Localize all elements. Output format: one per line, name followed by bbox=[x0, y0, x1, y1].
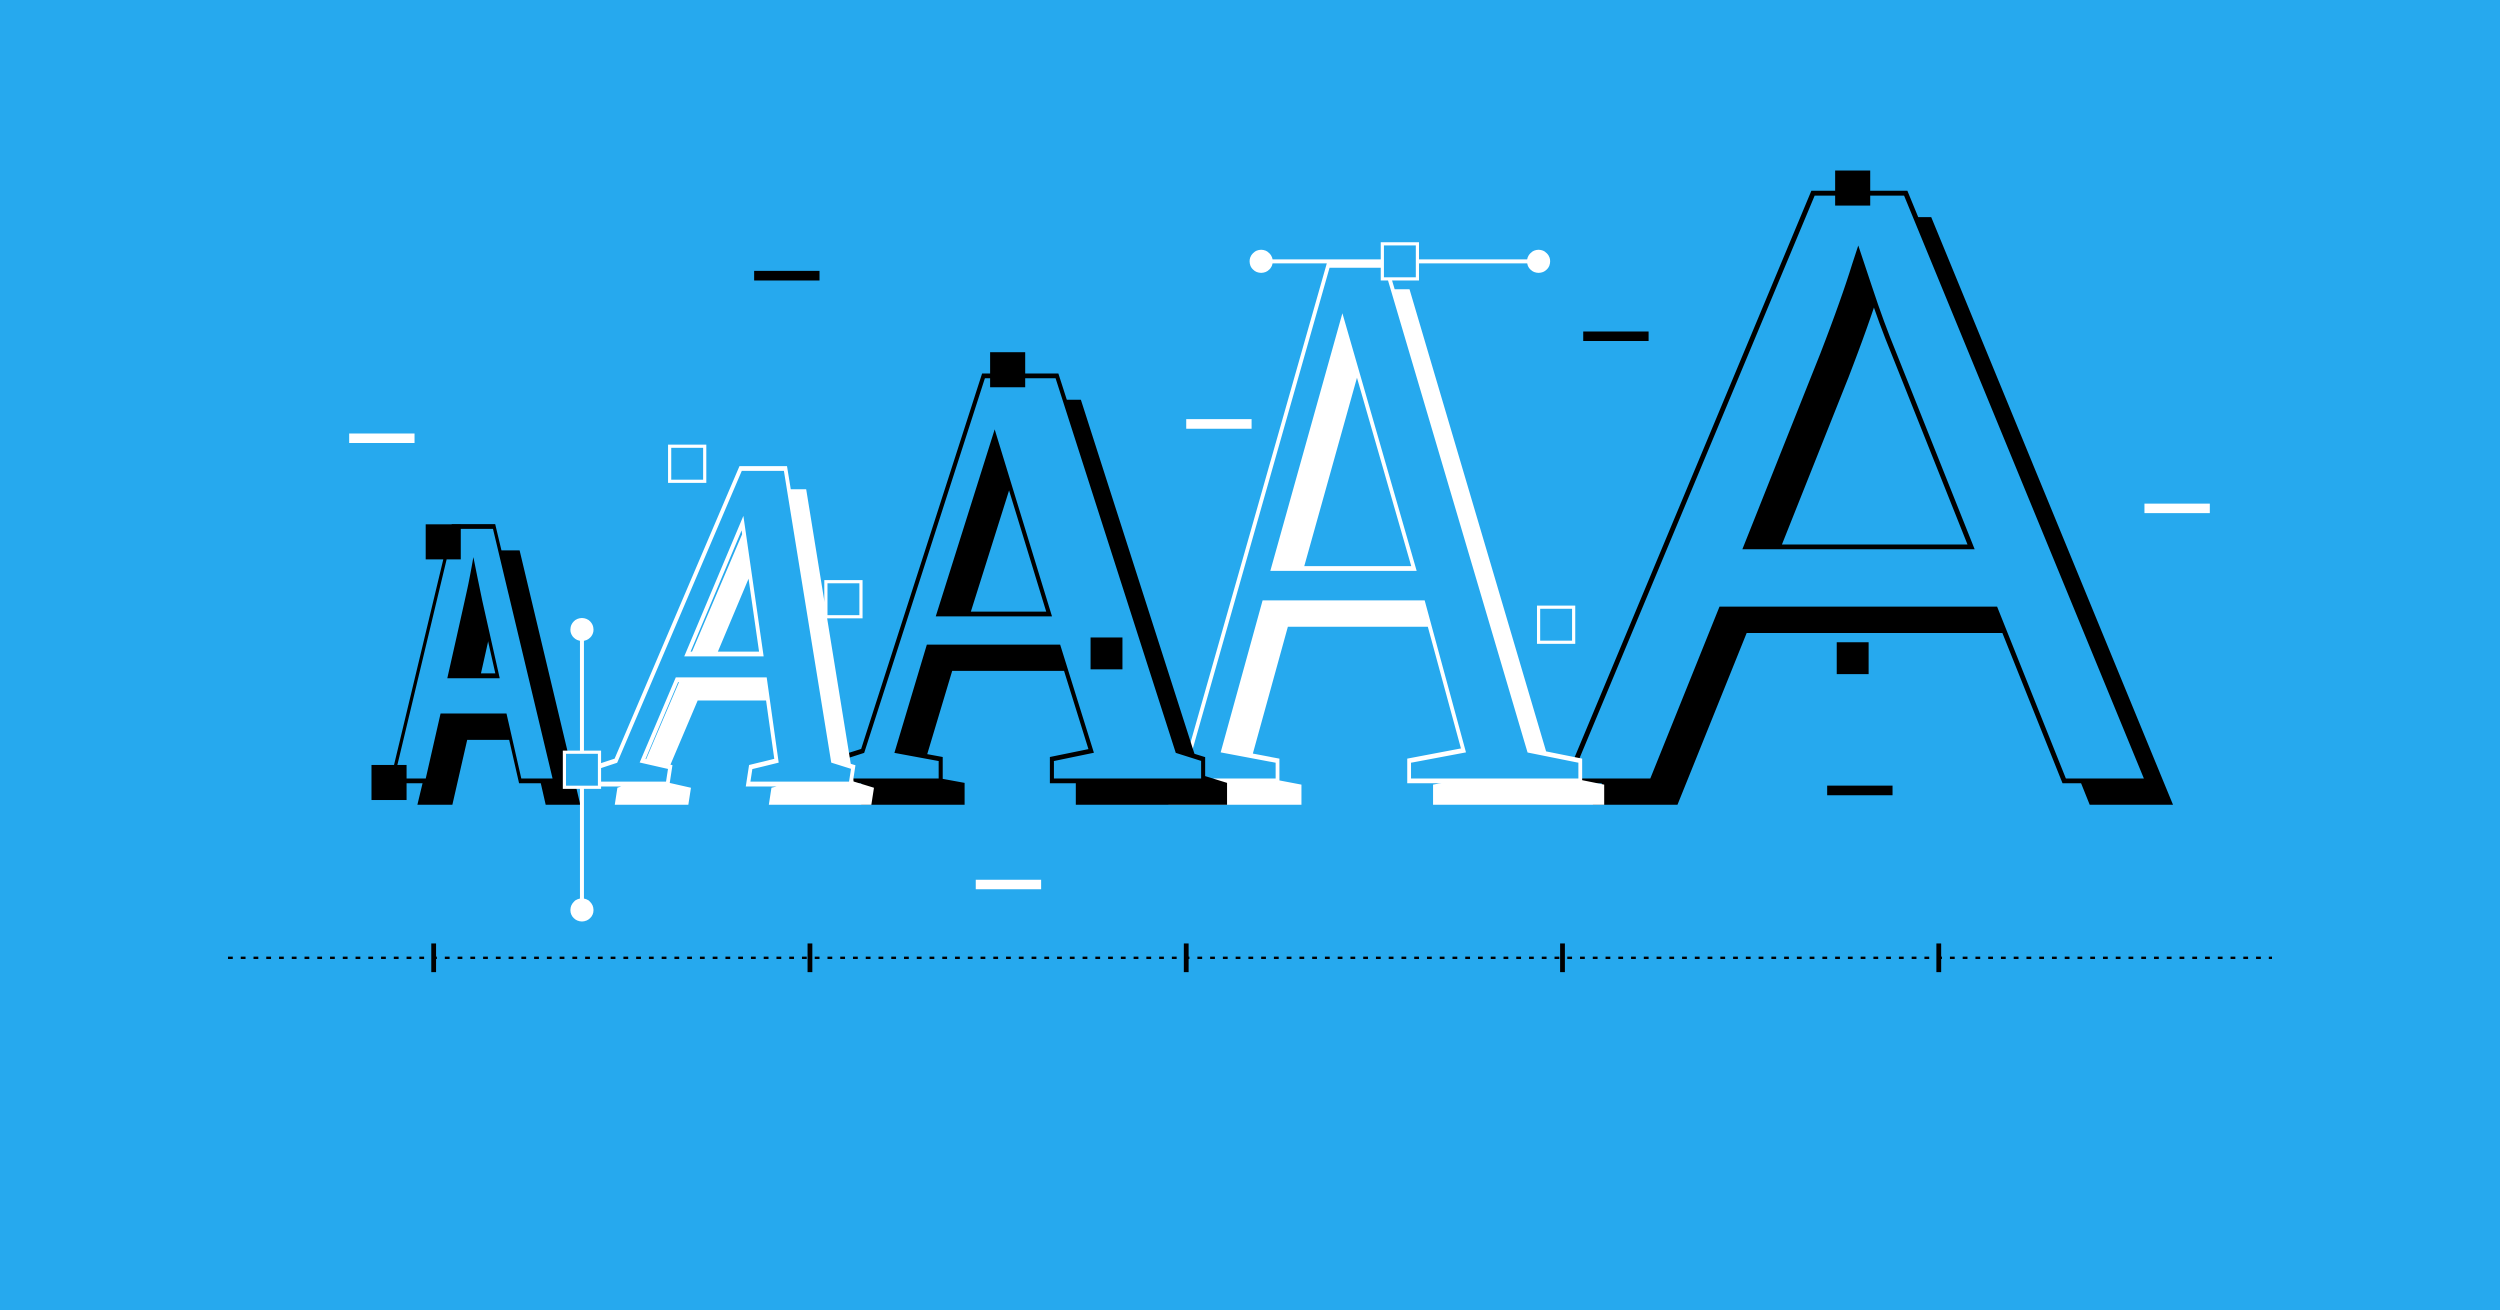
anchor points bbox=[371, 171, 1870, 800]
letter: swash A white: A bbox=[611, 380, 890, 909]
bezier handle lines bbox=[572, 252, 1548, 920]
dashes bbox=[349, 276, 2210, 884]
letter: display A black: A bbox=[832, 234, 1207, 914]
letter: blackletter A: A bbox=[386, 447, 561, 860]
baseline dotted ruler bbox=[228, 943, 2272, 972]
letter: large sans A: A bbox=[1566, 9, 2153, 963]
letter: serif A white: A bbox=[1138, 85, 1585, 950]
letter: blackletter A: A bbox=[411, 471, 587, 884]
letter: large sans A: A bbox=[1591, 33, 2179, 987]
letter: display A black: A bbox=[856, 258, 1231, 938]
letter: serif A white: A bbox=[1162, 109, 1609, 974]
letter: swash A white: A bbox=[590, 359, 869, 888]
